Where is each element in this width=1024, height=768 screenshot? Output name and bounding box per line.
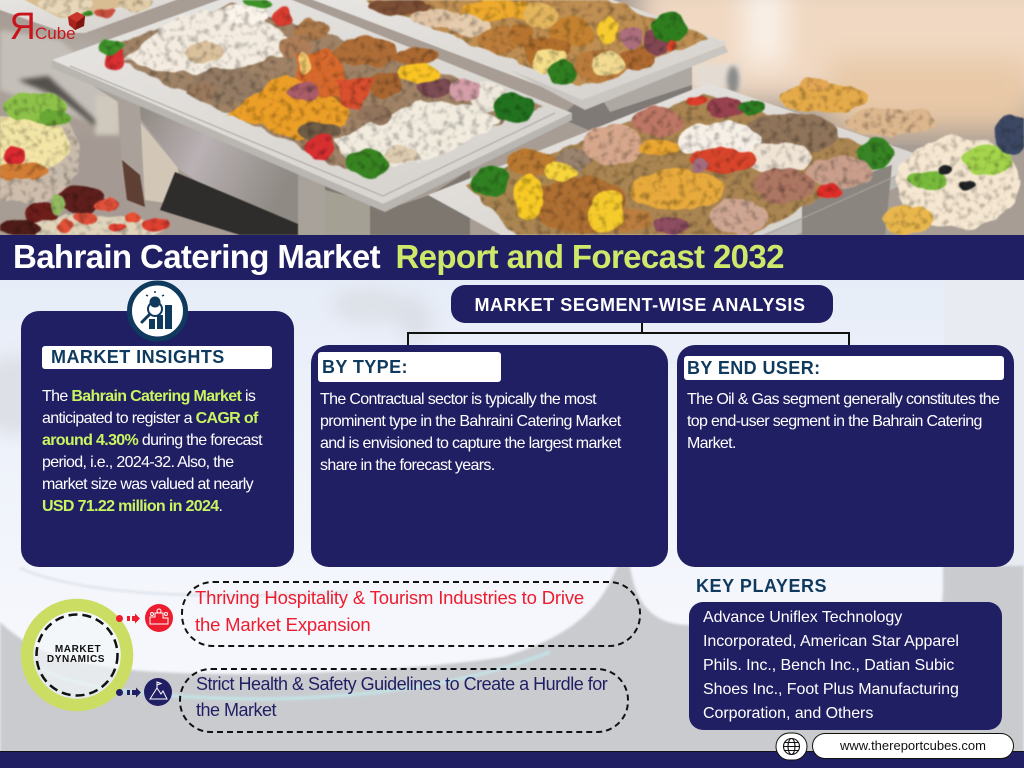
ring label: MARKET: [55, 644, 101, 655]
far-left tray piece: [0, 0, 190, 33]
far left food: [37, 0, 93, 15]
title text: Bahrain Catering Market Report and Forecast 2032: [13, 238, 784, 275]
by end user text: The Oil & Gas segment generally constitutes the: [687, 391, 999, 408]
by type text: [320, 391, 622, 474]
by end user text: Market.: [687, 435, 736, 452]
insights text: around 4.30% during the forecast: [42, 432, 262, 449]
key players text: Shoes Inc., Foot Plus Manufacturing: [703, 681, 959, 698]
by end user text: top end-user segment in the Bahrain Catering: [687, 413, 982, 430]
challenge text: [196, 674, 608, 720]
icon: globe: [776, 732, 808, 760]
icon: navy mountain flag: [144, 678, 172, 706]
title banner: [0, 235, 1024, 280]
key players text: Incorporated, American Star Apparel: [703, 633, 959, 650]
icon: insights magnifier and bars: [127, 280, 188, 342]
heading: by type: [318, 352, 501, 382]
insights text: The Bahrain Catering Market is: [42, 388, 255, 405]
insights text: USD 71.22 million in 2024.: [42, 498, 222, 515]
market dynamics graphic: [20, 598, 173, 712]
insights text: period, i.e., 2024-32. Also, the: [42, 454, 233, 471]
key players text: Corporation, and Others: [703, 705, 873, 722]
tray 3 food: [466, 94, 895, 240]
heading: by type: BY TYPE:: [322, 357, 408, 377]
driver text: the Market Expansion: [195, 614, 371, 635]
insights text: [42, 388, 262, 515]
by type text: share in the forecast years.: [320, 457, 495, 474]
heading: market insights: [42, 346, 272, 369]
ring: [27, 605, 127, 705]
logo: [10, 6, 85, 48]
tray 1 base: [84, 80, 385, 235]
challenge text: the Market: [196, 700, 276, 720]
tray 3 rim: [428, 83, 934, 240]
tray 2 rim: [300, 0, 728, 102]
hero photo: catering chafing trays: [0, 0, 1024, 235]
by type text: prominent type in the Bahraini Catering Market: [320, 413, 620, 430]
canapes: [58, 185, 102, 215]
tray 2 base: [560, 67, 692, 135]
food texture group: [0, 0, 1024, 240]
challenge callout: [179, 668, 629, 733]
heading: market segment-wise analysis: [451, 285, 833, 323]
arrow: navy: [116, 688, 141, 698]
key players text: Advance Uniflex Technology: [703, 609, 902, 626]
arrow: red: [116, 614, 140, 624]
heading: market insights: MARKET INSIGHTS: [51, 347, 225, 367]
by type text: The Contractual sector is typically the most: [320, 391, 596, 408]
insights text: anticipated to register a CAGR of: [42, 410, 258, 427]
logo mark: R cube: Я: [10, 6, 36, 48]
tray 1 food: [97, 3, 545, 173]
driver text: [195, 587, 584, 635]
key players text: [703, 609, 959, 722]
connector lines: [407, 323, 850, 345]
background: blurred bowl photo: [0, 286, 1024, 751]
website pill: www.thereportcubes.com: [840, 738, 986, 753]
heading: by end user: [684, 356, 1004, 380]
heading: by end user: BY END USER:: [687, 358, 820, 378]
left salad bowl: [0, 107, 79, 203]
tray 2 food: [350, 0, 710, 86]
right food and bowls: [780, 84, 870, 112]
tray 1 rim: [52, 0, 572, 204]
challenge text: Strict Health & Safety Guidelines to Create a Hurdle for: [196, 674, 607, 694]
heading: key players: KEY PLAYERS: [696, 576, 827, 596]
panel: market insights: [21, 311, 294, 567]
key players text: Phils. Inc., Bench Inc., Datian Subic: [703, 657, 954, 674]
logo: Cube: [35, 24, 76, 43]
driver callout: [181, 581, 641, 647]
by type text: and is envisioned to capture the largest market: [320, 435, 621, 452]
market dynamics graphic: DYNAMICS: [47, 654, 105, 665]
heading: market segment-wise analysis: MARKET SEGMENT-WISE ANALYSIS: [474, 295, 806, 315]
by end user text: [687, 391, 1000, 452]
website pill: [812, 733, 1014, 759]
driver text: Thriving Hospitality & Tourism Industries to Drive: [195, 587, 584, 608]
insights text: market size was valued at nearly: [42, 476, 253, 493]
panel: key players: [689, 602, 1002, 730]
panel: by end user: [677, 345, 1014, 567]
panel: by type: [311, 345, 668, 567]
icon: red people on podium: [145, 604, 173, 632]
footer band: [0, 751, 1024, 768]
